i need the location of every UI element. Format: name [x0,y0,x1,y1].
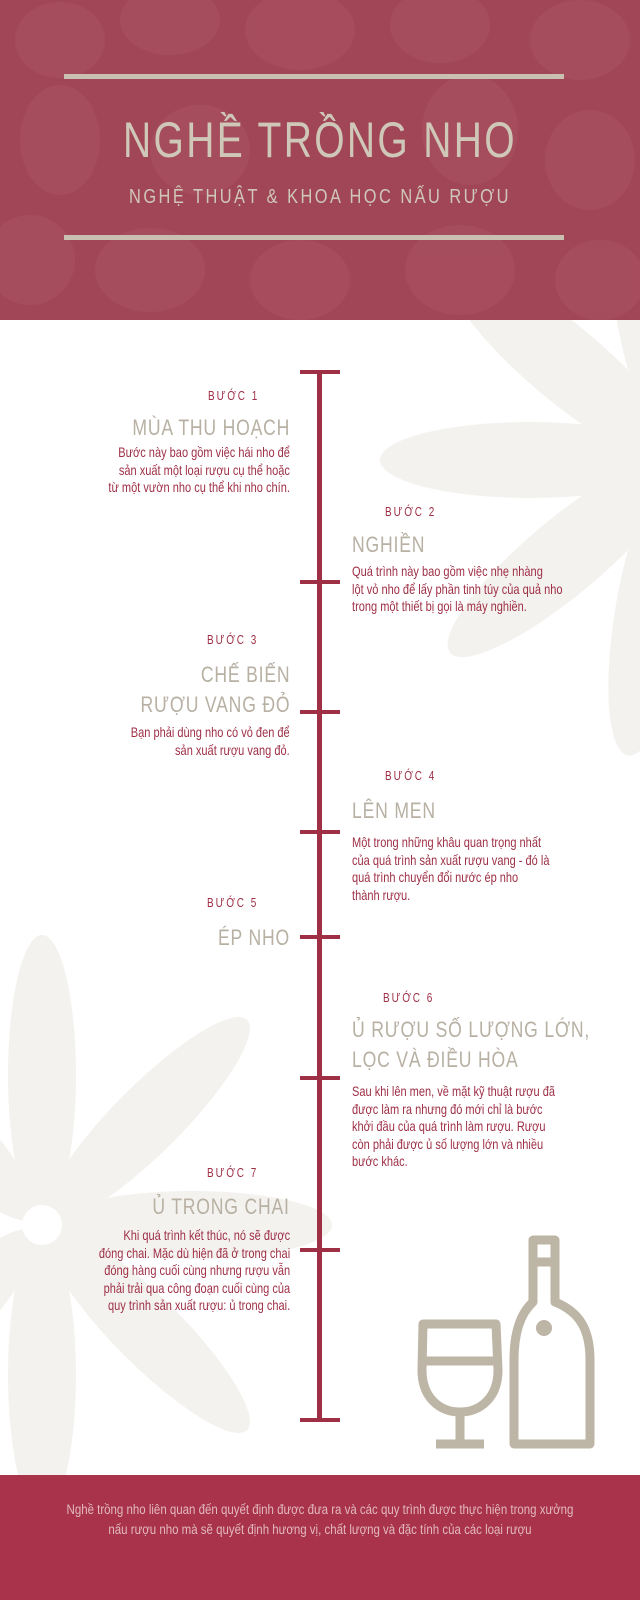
icon: wine glass and bottle [418,1236,594,1448]
step 6: còn phải được ủ số lượng lớn và nhiều [352,1136,543,1152]
step 1 [108,388,290,495]
step 6: Sau khi lên men, về mặt kỹ thuật rượu đã [352,1084,555,1099]
footer [0,1475,640,1600]
step 5: BƯỚC 5 [207,896,258,910]
step 2: Quá trình này bao gồm việc nhẹ nhàng [352,564,543,579]
step 7: BƯỚC 7 [207,1166,258,1180]
step 2: trong một thiết bị gọi là máy nghiền. [352,599,527,614]
footer text: nấu rượu nho mà sẽ quyết định hương vị, chất lượng và đặc tính của các loại rượu [108,1522,532,1537]
step 3: CHẾ BIẾN [200,662,290,687]
step 3: Bạn phải dùng nho có vỏ đen để [131,725,290,740]
step 1: sản xuất một loại rượu cụ thể hoặc [119,462,290,478]
step 3: BƯỚC 3 [207,633,258,647]
header rule top [64,74,564,79]
step 4: thành rượu. [352,888,410,902]
footer text [67,1502,573,1537]
step 4: BƯỚC 4 [385,769,436,783]
step 6: BƯỚC 6 [383,991,434,1005]
step 5: ÉP NHO [218,925,290,950]
step 7: đóng hàng cuối cùng nhưng rượu vẫn [104,1263,290,1278]
step 6: khởi đầu của quá trình làm rượu. Rượu [352,1119,546,1134]
step 6: bước khác. [352,1154,408,1169]
step 5 [207,896,290,950]
footer text: Nghề trồng nho liên quan đến quyết định được đưa ra và các quy trình được thực hiện trong xưởng [67,1502,573,1517]
header rule bottom [64,235,564,240]
step 3 [131,632,290,758]
header banner [0,0,640,320]
step 4: Một trong những khâu quan trọng nhất [352,835,541,850]
step 3: sản xuất rượu vang đỏ. [175,742,290,758]
step 7 [99,1166,290,1313]
step 7: đóng chai. Mặc dù hiện đã ở trong chai [99,1246,290,1260]
step 4 [352,768,550,902]
step 6: Ủ RƯỢU SỐ LƯỢNG LỚN, [352,1017,590,1042]
step 6: LỌC VÀ ĐIỀU HÒA [352,1047,519,1072]
step 4: LÊN MEN [352,798,436,823]
step 1: từ một vườn nho cụ thể khi nho chín. [108,480,290,495]
step 6 [352,990,590,1169]
step 7: phải trải qua công đoạn cuối cùng của [103,1280,290,1296]
step 2: BƯỚC 2 [385,505,436,519]
step 1: MÙA THU HOẠCH [132,415,290,440]
step 7: quy trình sản xuất rượu: ủ trong chai. [108,1298,290,1313]
step 3: RƯỢU VANG ĐỎ [140,692,290,717]
step 7: Ủ TRONG CHAI [153,1194,290,1219]
decorative flowers [0,320,640,1475]
step 2: NGHIỀN [352,532,425,557]
subtitle: NGHỆ THUẬT & KHOA HỌC NẤU RƯỢU [129,186,511,208]
title: NGHỀ TRỒNG NHO [123,112,517,168]
step 1: Bước này bao gồm việc hái nho để [118,445,290,460]
step 4: quá trình chuyển đổi nước ép nho [352,870,518,885]
step 6: được làm ra nhưng đó mới chỉ là bước [352,1102,543,1116]
step 7: Khi quá trình kết thúc, nó sẽ được [123,1228,290,1243]
step 4: của quá trình sản xuất rượu vang - đó là [352,852,549,868]
step 2: lột vỏ nho để lấy phần tinh túy của quả nho [352,582,562,596]
step 1: BƯỚC 1 [208,389,259,403]
step 2 [352,504,562,614]
